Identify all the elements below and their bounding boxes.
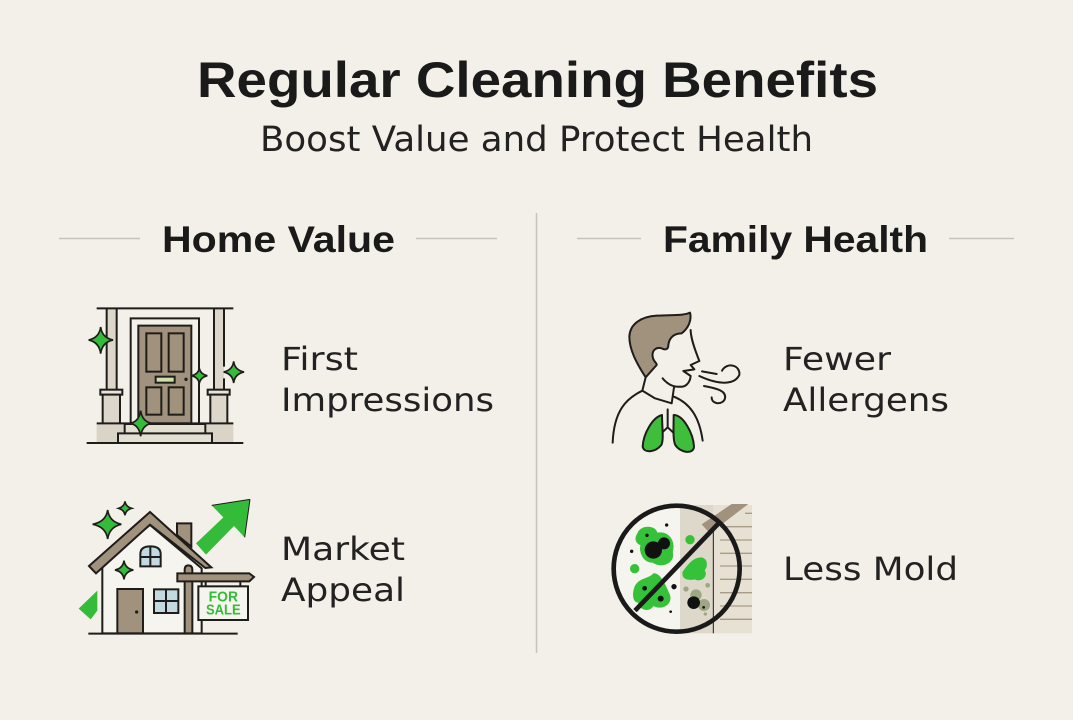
- label: market appeal: Market: [281, 530, 405, 568]
- icon: house for sale with rising arrow: SALE: [206, 602, 241, 618]
- icon: clean front door: [87, 308, 244, 443]
- label: fewer allergens: Fewer: [783, 340, 892, 378]
- label: market appeal: [281, 530, 405, 609]
- heading: home value: Home Value: [162, 219, 395, 260]
- icon: person breathing with lungs: [613, 313, 739, 452]
- icon: house for sale with rising arrow: [79, 499, 254, 634]
- label: fewer allergens: Allergens: [783, 381, 949, 419]
- title: Regular Cleaning Benefits: [197, 52, 878, 108]
- label: first impressions: [281, 340, 494, 419]
- heading: family health: Family Health: [663, 219, 928, 260]
- label: less mold: Less Mold: [783, 550, 958, 588]
- icon: no mold: [614, 504, 752, 633]
- label: first impressions: Impressions: [281, 381, 494, 419]
- label: first impressions: First: [281, 340, 358, 378]
- icon: house for sale with rising arrow: FOR: [209, 590, 239, 606]
- subtitle: Boost Value and Protect Health: [260, 120, 813, 160]
- label: market appeal: Appeal: [281, 571, 405, 609]
- label: fewer allergens: [783, 340, 949, 419]
